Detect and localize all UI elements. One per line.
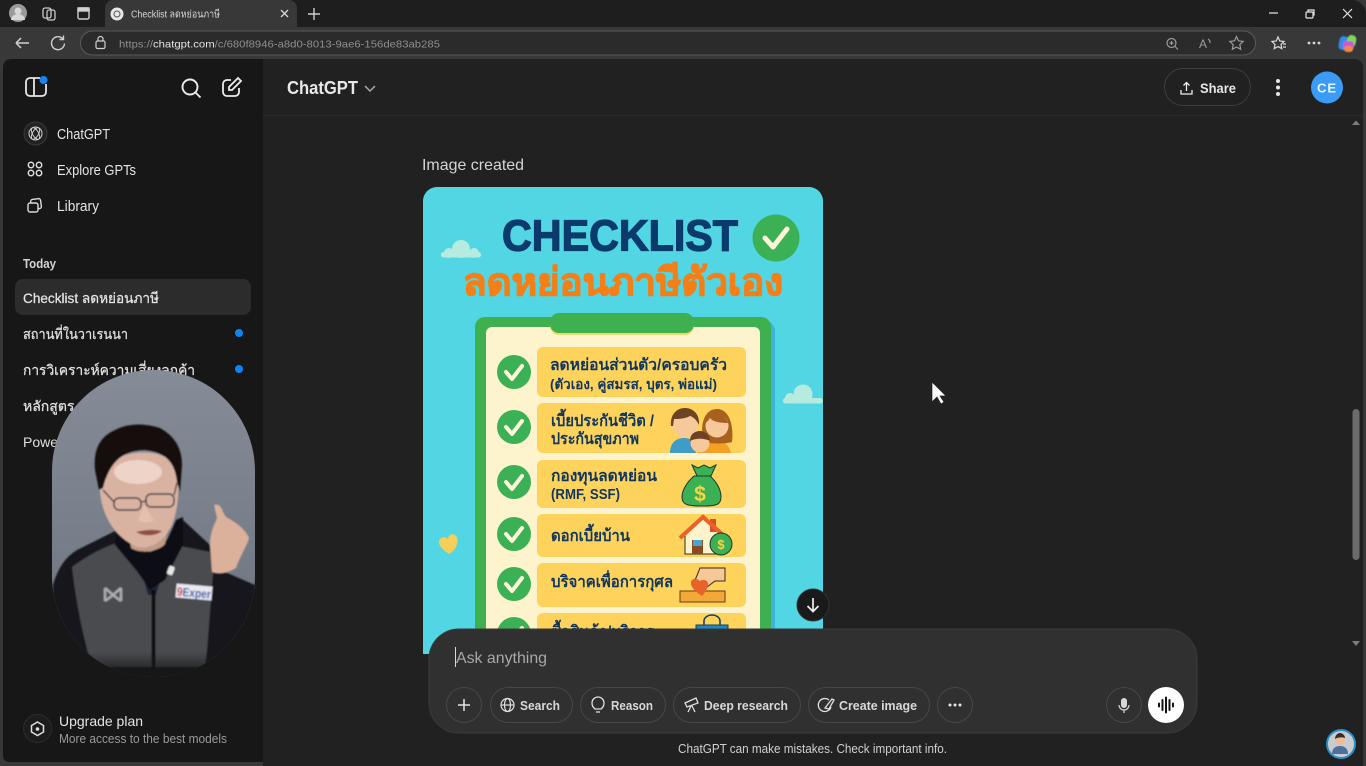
row 3: tax saving funds: กองทุนลดหย่อน bbox=[551, 468, 657, 486]
icon: new chat bbox=[223, 78, 241, 96]
collar bbox=[115, 517, 183, 590]
share button bbox=[1164, 68, 1250, 106]
button: reason bbox=[580, 688, 666, 722]
upgrade plan bbox=[24, 713, 227, 746]
header bar bbox=[263, 68, 1363, 116]
chat item 2 bbox=[23, 325, 243, 342]
icon: back bbox=[16, 38, 29, 48]
icon: money bag: $ bbox=[694, 483, 706, 506]
window controls bbox=[1269, 9, 1352, 18]
button: reason: Reason bbox=[611, 698, 653, 713]
row 4: mortgage interest: ดอกเบี้ยบ้าน bbox=[551, 523, 630, 545]
bottom fade bbox=[92, 656, 206, 677]
prompt input box bbox=[429, 629, 1197, 733]
icon: new tab bbox=[308, 8, 320, 20]
icon: copilot bbox=[1338, 34, 1357, 52]
small corner avatar bbox=[1327, 730, 1355, 758]
button: create image bbox=[808, 688, 930, 722]
row 2: life and health insurance bbox=[497, 403, 746, 453]
microphone clip bbox=[166, 565, 175, 576]
row 1: personal allowance bbox=[497, 347, 746, 397]
active tab bbox=[105, 0, 297, 27]
active tab: Checklist ลดหย่อนภาษี bbox=[131, 8, 220, 20]
section heading: Today: Today bbox=[23, 257, 56, 271]
icon: house and coin: $ bbox=[717, 537, 725, 552]
t-shirt bbox=[144, 582, 160, 596]
nav: Explore GPTs: Explore GPTs bbox=[57, 163, 136, 179]
row 5: charity donation: บริจาคเพื่อการกุศล bbox=[551, 570, 673, 592]
zip bbox=[152, 590, 156, 670]
button: add bbox=[446, 688, 482, 722]
clipboard bbox=[475, 313, 775, 628]
icon: search bbox=[182, 80, 200, 98]
user avatar CE bbox=[1311, 72, 1343, 104]
address bar icons: A bbox=[1199, 37, 1207, 51]
presenter video overlay bbox=[52, 370, 255, 677]
infographic image: checklist bbox=[423, 187, 823, 654]
placeholder text: Ask anything bbox=[456, 650, 547, 667]
label: image created: Image created bbox=[422, 157, 524, 174]
upgrade plan: Upgrade plan bbox=[59, 713, 143, 729]
jacket grey panel bbox=[72, 543, 213, 667]
browser address bar bbox=[0, 27, 1366, 59]
nav: Library bbox=[28, 198, 100, 215]
icon: hand with heart and box bbox=[680, 568, 725, 602]
button: voice mode bbox=[1148, 687, 1184, 723]
icon: reload bbox=[52, 36, 64, 50]
chat item: active: Checklist ลดหย่อนภาษี bbox=[23, 290, 159, 306]
icon: title check badge bbox=[752, 214, 800, 262]
icon: house and coin bbox=[680, 517, 732, 555]
profile avatar bbox=[9, 4, 27, 22]
icon: sidebar toggle bbox=[26, 76, 48, 96]
nose and mouth bbox=[138, 506, 154, 522]
row 4: mortgage interest bbox=[497, 514, 746, 557]
subtitle: Thai: ลดหย่อนภาษีตัวเอง bbox=[463, 262, 783, 304]
address field bbox=[80, 31, 1256, 55]
jacket bbox=[52, 520, 255, 677]
mouse cursor bbox=[932, 382, 946, 404]
button: more tools bbox=[938, 688, 972, 722]
chat item 5: Power bbox=[23, 434, 63, 450]
nav: ChatGPT: ChatGPT bbox=[57, 127, 110, 143]
logo left bbox=[105, 588, 121, 601]
row 1: personal allowance: (ตัวเอง, คู่สมรส, บุตร, พ่อแม่) bbox=[550, 376, 717, 393]
icon: shopping bag bbox=[696, 614, 728, 628]
chat item 4: หลักสูตร bbox=[23, 398, 75, 415]
icon: vertical tabs bbox=[78, 8, 89, 19]
button: search: Search bbox=[520, 698, 560, 713]
chat item 3: การวิเคราะห์ความเสี่ยงลูกค้า bbox=[23, 361, 195, 379]
user avatar CE: CE bbox=[1317, 80, 1337, 96]
icon: cloud right bbox=[783, 384, 823, 404]
nav: Library: Library bbox=[57, 199, 100, 215]
row 5: charity donation bbox=[497, 563, 746, 607]
forehead highlight bbox=[114, 460, 162, 484]
row 6: goods and services bbox=[498, 613, 746, 628]
row 3: tax saving funds bbox=[497, 460, 746, 508]
browser tab strip bbox=[0, 0, 1366, 27]
row 3: tax saving funds: (RMF, SSF) bbox=[551, 486, 620, 503]
icon: more menu bbox=[1276, 79, 1280, 96]
title: CHECKLIST: CHECKLIST bbox=[502, 212, 738, 260]
row 2: life and health insurance: ประกันสุขภาพ bbox=[551, 430, 639, 449]
glasses bbox=[103, 483, 177, 510]
badge: 9Exper bbox=[176, 585, 212, 601]
icon: family bbox=[670, 408, 732, 453]
main content background bbox=[263, 59, 1363, 766]
button: search bbox=[490, 688, 572, 722]
disclaimer text: ChatGPT can make mistakes. Check important info. bbox=[678, 742, 947, 756]
share button: Share bbox=[1200, 81, 1236, 96]
upgrade plan: More access to the best models bbox=[59, 732, 227, 746]
toolbar icons bbox=[1272, 37, 1320, 49]
neck bbox=[129, 533, 168, 553]
button: deep research bbox=[674, 688, 800, 722]
address field: https://chatgpt.com /c/680f8946-a8d0-8013-9ae6-156de83ab285 bbox=[119, 38, 440, 50]
row 6: goods and services: ซื้อสินค้า/บริการ bbox=[551, 619, 654, 641]
hair bbox=[95, 424, 182, 492]
button: microphone bbox=[1106, 688, 1142, 722]
address bar icons bbox=[1167, 36, 1243, 51]
face bbox=[100, 452, 178, 548]
hand bbox=[210, 504, 249, 573]
icon: workspaces bbox=[43, 8, 55, 20]
button: scroll down bbox=[797, 589, 829, 621]
chat item: active bbox=[15, 279, 251, 315]
heading: ChatGPT model selector: ChatGPT bbox=[287, 78, 358, 98]
chat item 2: สถานที่ในวาเรนนา bbox=[23, 325, 128, 342]
nav: ChatGPT bbox=[24, 122, 110, 145]
row 2: life and health insurance: เบี้ยประกันชีวิต / bbox=[551, 408, 655, 430]
sidebar bbox=[3, 59, 263, 762]
icon: cloud left bbox=[441, 240, 481, 258]
icon: money bag bbox=[682, 465, 721, 506]
nav: Explore GPTs bbox=[28, 162, 136, 179]
button: create image: Create image bbox=[839, 698, 917, 713]
row 1: personal allowance: ลดหย่อนส่วนตัว/ครอบครัว bbox=[550, 356, 727, 374]
scrollbar bbox=[1352, 120, 1360, 646]
icon: heart bbox=[439, 534, 458, 554]
button: deep research: Deep research bbox=[704, 698, 788, 713]
